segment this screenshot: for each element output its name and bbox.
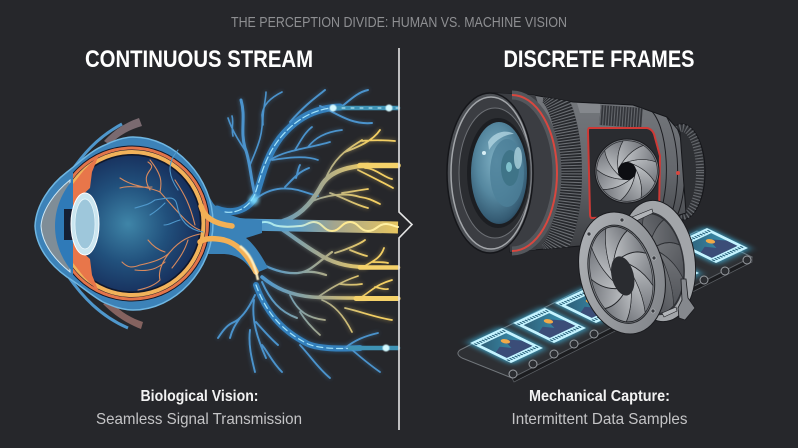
top plate	[577, 103, 602, 113]
blue lower nerve tree	[218, 285, 380, 378]
rear mount	[659, 124, 705, 220]
caption: mechanical capture	[512, 388, 688, 428]
caption: biological vision: Seamless Signal Transmission	[96, 411, 302, 428]
icon: camera lens	[447, 90, 705, 256]
connecting rods	[632, 209, 653, 222]
belt rollers	[509, 256, 751, 378]
caption: biological vision	[96, 388, 302, 428]
red ring	[512, 95, 557, 251]
trunk highlights	[225, 107, 360, 349]
glowing top signal	[333, 104, 398, 110]
title: THE PERCEPTION DIVIDE: HUMAN VS. MACHINE VISION	[231, 14, 567, 31]
front ring	[447, 93, 533, 253]
upper knurl	[600, 115, 642, 118]
eye muscles	[68, 118, 143, 329]
caption: biological vision: Biological Vision:	[140, 388, 258, 405]
film frames	[467, 227, 751, 364]
front shutter ring	[566, 203, 678, 343]
section lines	[652, 112, 684, 214]
nerve trees	[217, 90, 395, 378]
belt surface	[458, 231, 752, 378]
optic nerve sheath	[195, 190, 268, 274]
neural signal branches	[217, 90, 398, 378]
caption: mechanical capture: Mechanical Capture:	[529, 388, 670, 405]
nerve tree glow	[217, 90, 395, 378]
shutter lever	[678, 279, 695, 320]
yellow upper branch	[283, 130, 395, 221]
barrel details	[490, 90, 685, 256]
yellow lower branches	[258, 230, 392, 335]
icon: mechanical shutter assembly	[566, 195, 703, 343]
heading: discrete frames: DISCRETE FRAMES	[504, 46, 694, 73]
iris	[55, 178, 74, 274]
aperture window	[588, 128, 660, 218]
blue upper nerve tree	[217, 90, 372, 212]
sclera	[35, 137, 213, 310]
icon: anatomical eye	[35, 118, 268, 329]
aperture iris	[595, 139, 659, 203]
caption: mechanical capture: Intermittent Data Samples	[512, 411, 688, 428]
ring bolts	[587, 218, 656, 313]
rear shutter ring	[613, 195, 703, 327]
lens	[71, 193, 99, 255]
glowing bottom signal	[350, 344, 398, 352]
retina layers	[73, 146, 210, 302]
center divider	[399, 48, 412, 430]
film conveyor belt	[458, 227, 752, 382]
pupil gap	[64, 209, 74, 240]
red dot	[676, 171, 680, 175]
heading: continuous stream: CONTINUOUS STREAM	[85, 46, 313, 73]
lens glass	[471, 122, 527, 224]
knurled grip ring	[543, 90, 570, 256]
barrel body	[493, 93, 686, 252]
front dark collar	[496, 93, 552, 252]
glowing yellow signals	[362, 161, 398, 169]
more yellow signals	[358, 294, 398, 302]
central optic band	[240, 220, 398, 234]
optic nerve orange	[201, 206, 232, 226]
ciliary body	[73, 155, 99, 210]
cornea chamber	[41, 180, 70, 272]
retinal vessels	[120, 150, 203, 290]
